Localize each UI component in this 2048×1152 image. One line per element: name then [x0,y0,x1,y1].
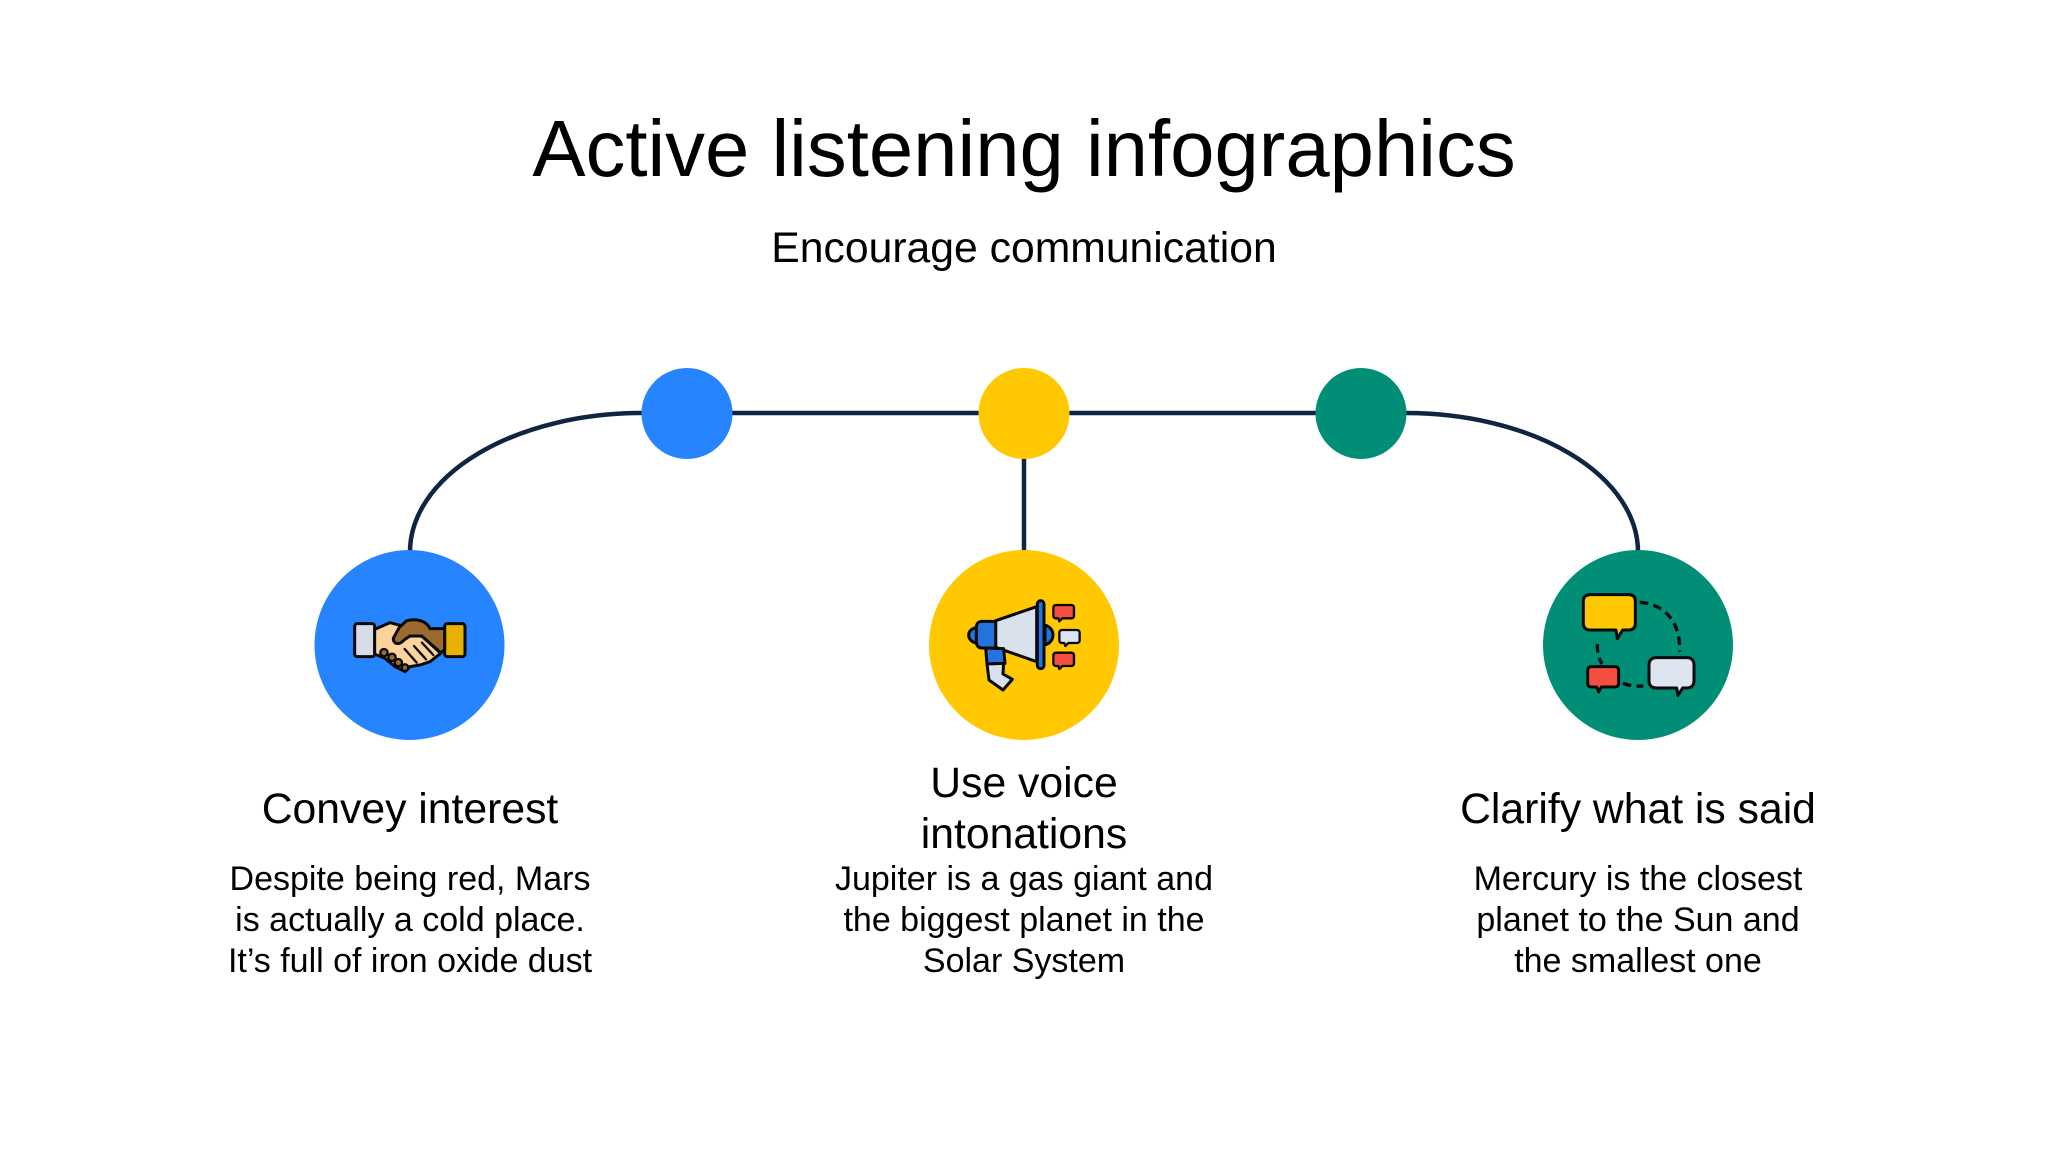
body text: Despite being red, Mars [230,860,590,898]
connector lines [410,413,1638,552]
card: use voice intonations [835,759,1213,980]
title: Active listening infographics [532,104,1516,193]
body text: the smallest one [1514,942,1762,980]
body text: the biggest planet in the [843,901,1205,939]
body text: Jupiter is a gas giant and [835,860,1213,898]
node: green [1316,368,1406,459]
body text: planet to the Sun and [1476,901,1800,939]
body text [835,860,1213,980]
heading: intonations [921,810,1127,858]
icon: connected speech bubbles [1583,595,1694,695]
body text [1474,860,1802,980]
heading: Convey interest [262,785,558,833]
circle: yellow [929,550,1119,740]
body text [228,860,592,980]
subtitle: Encourage communication [771,224,1277,272]
circle: blue [314,550,504,740]
node: blue [642,368,732,459]
heading [921,759,1127,858]
body text: is actually a cold place. [235,901,585,939]
heading: Use voice [930,759,1118,807]
card: clarify what is said [1460,785,1816,980]
card: convey interest [228,785,592,980]
heading: Clarify what is said [1460,785,1816,833]
icon: handshake [355,620,465,672]
node: yellow [978,368,1070,459]
body text: Mercury is the closest [1474,860,1802,898]
circle: green [1543,550,1733,740]
icon: megaphone [969,601,1080,690]
body text: It’s full of iron oxide dust [228,942,592,980]
body text: Solar System [923,942,1125,980]
